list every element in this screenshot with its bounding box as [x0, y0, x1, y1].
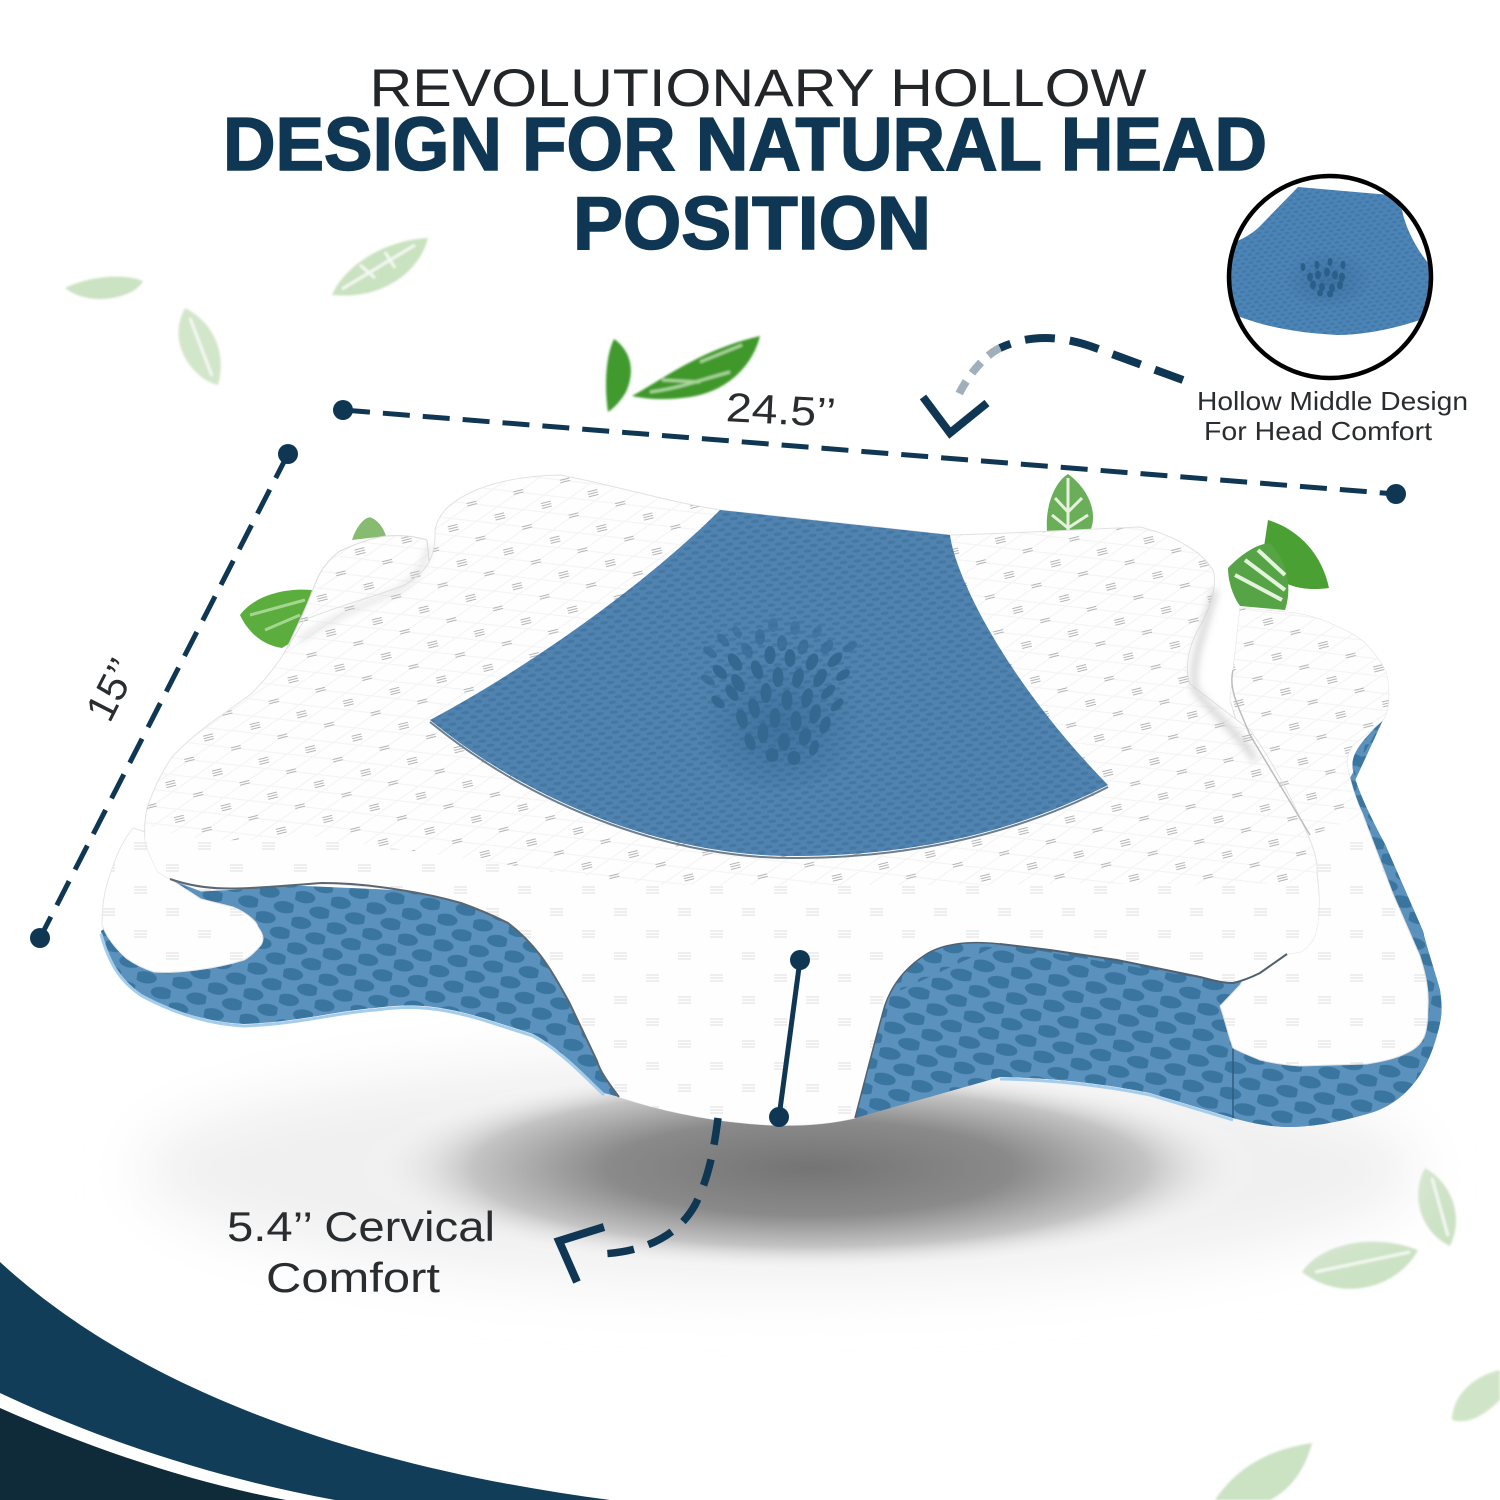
front soft face	[145, 825, 1319, 1125]
lower right white layer	[1220, 608, 1428, 1066]
pillow base blue layer	[101, 720, 1442, 1127]
background curve	[0, 1262, 610, 1500]
width dimension line	[333, 400, 1406, 504]
faded leaves top left	[65, 238, 428, 385]
hollow dimple holes	[699, 618, 859, 765]
lower left white layer	[102, 828, 263, 972]
depth dimension line	[30, 444, 298, 948]
title: REVOLUTIONARY HOLLOW	[370, 59, 1146, 118]
cervical caption: 5.4’’ Cervical	[227, 1203, 495, 1250]
pillow	[101, 475, 1442, 1127]
width label: 24.5’’	[725, 384, 837, 436]
hollow centre panel	[430, 510, 1108, 858]
upper left ear	[286, 536, 430, 650]
callout arrow to inset	[923, 338, 1183, 433]
leaf behind pillow top	[1047, 474, 1093, 531]
leaf cluster top centre	[606, 336, 760, 412]
top foam layer	[145, 475, 1319, 1125]
title: POSITION	[573, 181, 931, 265]
cervical arrow	[559, 1118, 718, 1282]
faded leaves bottom right	[1215, 1168, 1500, 1500]
cervical caption	[227, 1203, 495, 1301]
pillow shadow	[140, 1055, 1420, 1285]
cervical caption: Comfort	[266, 1254, 440, 1301]
fold shading	[1194, 590, 1255, 760]
inset caption	[1197, 386, 1468, 446]
title: DESIGN FOR NATURAL HEAD	[223, 102, 1267, 186]
inset caption: Hollow Middle Design	[1197, 386, 1468, 416]
inset caption: For Head Comfort	[1204, 416, 1433, 446]
title	[223, 59, 1267, 265]
leaves behind pillow right	[1228, 520, 1329, 610]
detail inset circle	[1225, 176, 1436, 378]
depth label: 15’’	[77, 651, 146, 728]
height dimension line	[769, 950, 810, 1127]
leaves behind pillow left	[240, 517, 386, 648]
